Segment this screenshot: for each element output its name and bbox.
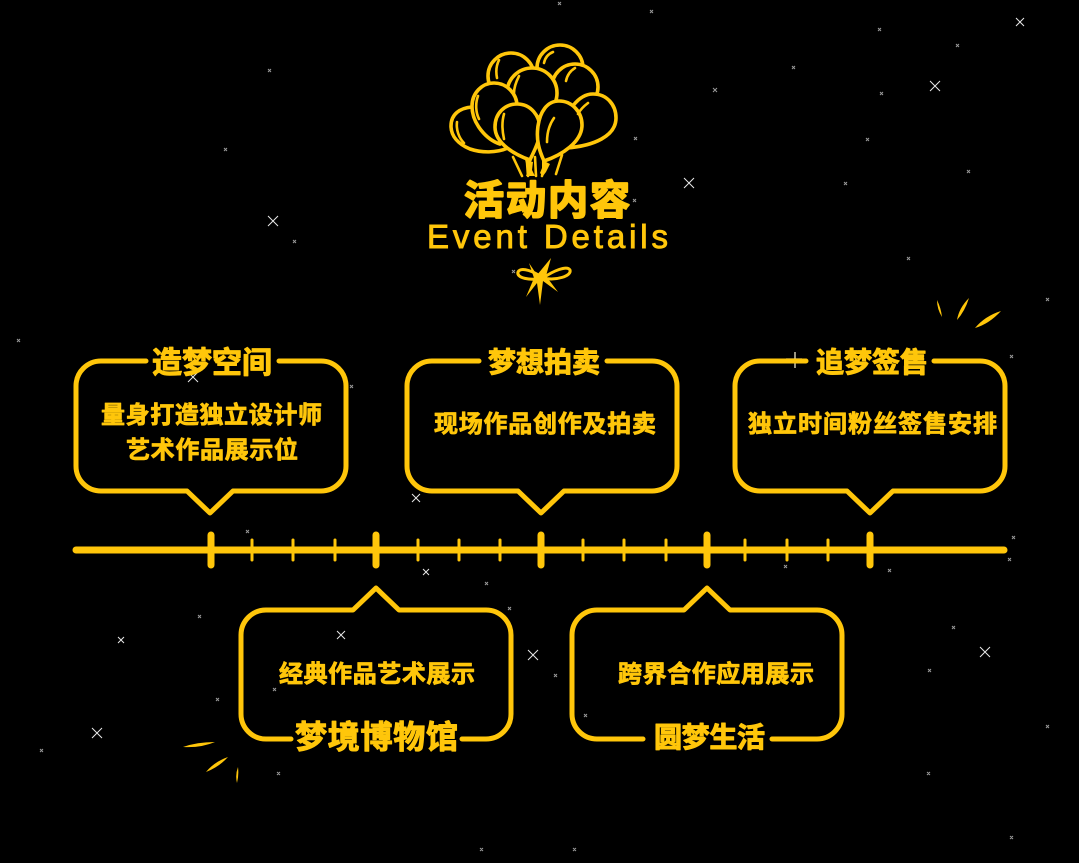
callout outline — [572, 588, 842, 739]
callout outline — [735, 361, 1005, 513]
panel: 造梦空间 — [76, 347, 346, 513]
heading: 梦境博物馆 — [295, 719, 458, 755]
panel: 圆梦生活 — [572, 588, 842, 753]
callout outline — [241, 588, 511, 739]
chinese title: 活动内容 — [464, 179, 630, 223]
panel: 追梦签售 — [735, 347, 1005, 513]
icon: ribbon bow — [518, 258, 570, 305]
heading: 追梦签售 — [816, 347, 928, 378]
heading: 梦想拍卖 — [488, 347, 600, 378]
balloon knots — [525, 160, 550, 176]
panel: 梦境博物馆 — [241, 588, 511, 755]
description: 艺术作品展示位 — [126, 436, 298, 464]
callout outline — [407, 361, 677, 513]
balloons — [451, 45, 616, 161]
sparkle lines: bottom left — [183, 742, 238, 783]
heading: 造梦空间 — [152, 347, 272, 380]
axis — [76, 546, 1004, 554]
description: 经典作品艺术展示 — [279, 661, 475, 688]
description: 跨界合作应用展示 — [618, 661, 814, 688]
heading: 圆梦生活 — [654, 722, 765, 753]
callout outline — [76, 361, 346, 513]
sparkle lines: top right — [937, 298, 1001, 328]
balloon highlights — [457, 52, 588, 143]
major ticks — [211, 535, 870, 565]
description — [101, 402, 322, 464]
description: 量身打造独立设计师 — [101, 402, 322, 429]
title — [427, 179, 668, 255]
english title: Event Details — [427, 218, 668, 255]
balloon strings — [513, 155, 562, 176]
timeline — [76, 535, 1004, 565]
icon: balloon bunch — [451, 45, 616, 176]
description: 现场作品创作及拍卖 — [434, 411, 656, 438]
panel: 梦想拍卖 — [407, 347, 677, 513]
description: 独立时间粉丝签售安排 — [748, 411, 997, 438]
minor ticks — [252, 540, 828, 560]
